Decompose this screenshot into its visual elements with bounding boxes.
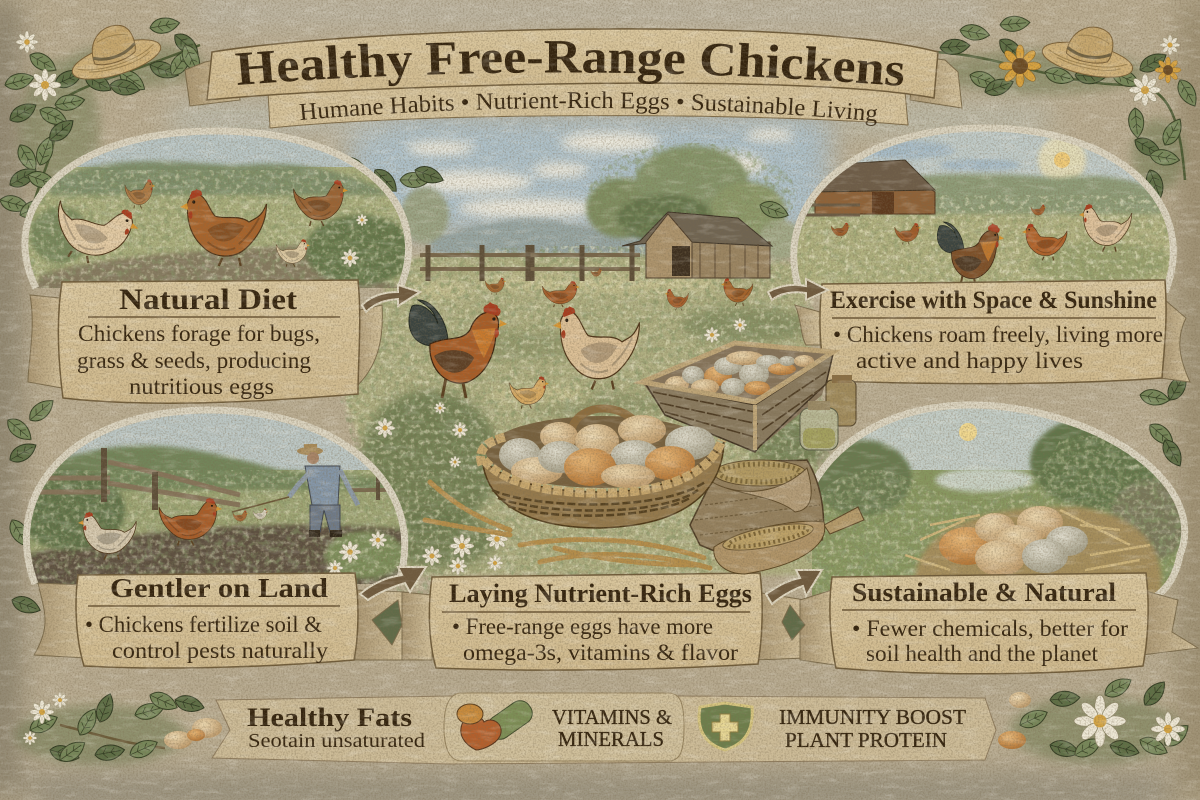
panel: gentler on land scene xyxy=(22,406,408,586)
meadow flowers xyxy=(375,318,747,575)
body text: • Free-range eggs have more xyxy=(452,614,713,639)
grain sack xyxy=(690,460,823,570)
panel: natural diet scene xyxy=(21,128,412,290)
corner foliage bottom-right with daisies xyxy=(998,674,1193,764)
heading: Laying Nutrient-Rich Eggs xyxy=(449,579,752,608)
meadow and sky of the central scene xyxy=(170,105,1050,600)
card: natural diet xyxy=(58,280,360,403)
subtitle: Humane Habits • Nutrient-Rich Eggs • Sustainable Living xyxy=(299,91,878,126)
arrow: land to eggs xyxy=(360,567,426,600)
title: Healthy Free-Range Chickens xyxy=(235,41,904,86)
item: vitamins and minerals: MINERALS xyxy=(558,727,664,751)
body text xyxy=(85,612,329,663)
title banner xyxy=(206,28,939,101)
wheat xyxy=(425,482,710,568)
body text: active and happy lives xyxy=(856,348,1083,373)
item: healthy fats: Seotain unsaturated xyxy=(248,730,425,752)
body text: grass & seeds, producing xyxy=(77,348,311,373)
meadow xyxy=(345,246,822,575)
corner foliage top-left with straw hat xyxy=(0,14,205,255)
meadow shading xyxy=(360,307,830,568)
barn xyxy=(622,212,772,278)
body text: • Chickens roam freely, living more xyxy=(833,322,1163,347)
body text xyxy=(833,322,1163,373)
body text: soil health and the planet xyxy=(866,641,1099,666)
clouds xyxy=(406,129,794,218)
heading: Natural Diet xyxy=(119,283,297,316)
body text: nutritious eggs xyxy=(129,374,274,399)
corner foliage bottom-left xyxy=(15,688,222,766)
grass texture xyxy=(340,240,840,600)
card: exercise xyxy=(820,280,1166,384)
farmer xyxy=(232,444,358,537)
body text: • Chickens fertilize soil & xyxy=(85,612,322,637)
item: healthy fats: Healthy Fats xyxy=(247,703,412,732)
body text: • Fewer chemicals, better for xyxy=(852,616,1128,641)
heading: Gentler on Land xyxy=(110,573,328,603)
side foliage xyxy=(3,153,1191,617)
card: gentler on land xyxy=(76,573,358,668)
ribbon tails xyxy=(28,56,1198,665)
body text xyxy=(452,614,738,665)
item: immunity boost: IMMUNITY BOOST xyxy=(779,705,966,729)
item: vitamins and minerals xyxy=(444,693,684,761)
fence xyxy=(420,245,640,281)
panel: sustainable scene xyxy=(812,402,1188,596)
subtitle banner xyxy=(268,84,908,128)
card: nutrient-rich eggs xyxy=(429,573,762,670)
arrow: eggs to sustainable xyxy=(766,570,822,604)
arrow: centre to exercise xyxy=(768,279,828,300)
arrow: natural diet to centre xyxy=(362,285,420,312)
nest basket with eggs xyxy=(481,408,724,528)
item: immunity boost xyxy=(699,703,966,752)
card: sustainable and natural xyxy=(830,573,1148,674)
heading: Sustainable & Natural xyxy=(852,578,1116,607)
item: immunity boost: PLANT PROTEIN xyxy=(785,728,947,752)
foreground produce: crate, jars, wheat, sack, basket, scoop xyxy=(425,343,864,574)
body text: omega-3s, vitamins & flavor xyxy=(463,640,738,665)
scoop of grain xyxy=(714,507,864,574)
jars xyxy=(800,375,856,450)
distant hills xyxy=(430,219,680,255)
distant hens xyxy=(485,268,753,310)
heading: Exercise with Space & Sunshine xyxy=(830,287,1157,314)
panel: exercise scene xyxy=(790,124,1177,294)
body text xyxy=(852,616,1128,666)
body text: control pests naturally xyxy=(112,638,329,663)
item: vitamins and minerals: VITAMINS & xyxy=(552,705,672,729)
egg crate xyxy=(642,343,833,452)
item: healthy fats xyxy=(247,703,425,752)
corner foliage top-right with sunflower and hat xyxy=(935,15,1200,201)
chick xyxy=(510,376,549,409)
trees behind barn xyxy=(401,140,802,260)
body text: Chickens forage for bugs, xyxy=(78,321,320,346)
body text xyxy=(77,321,320,399)
sky xyxy=(170,105,1050,235)
bottom nutrition strip xyxy=(212,693,996,764)
buff hen xyxy=(553,306,639,389)
rooster xyxy=(409,300,507,398)
